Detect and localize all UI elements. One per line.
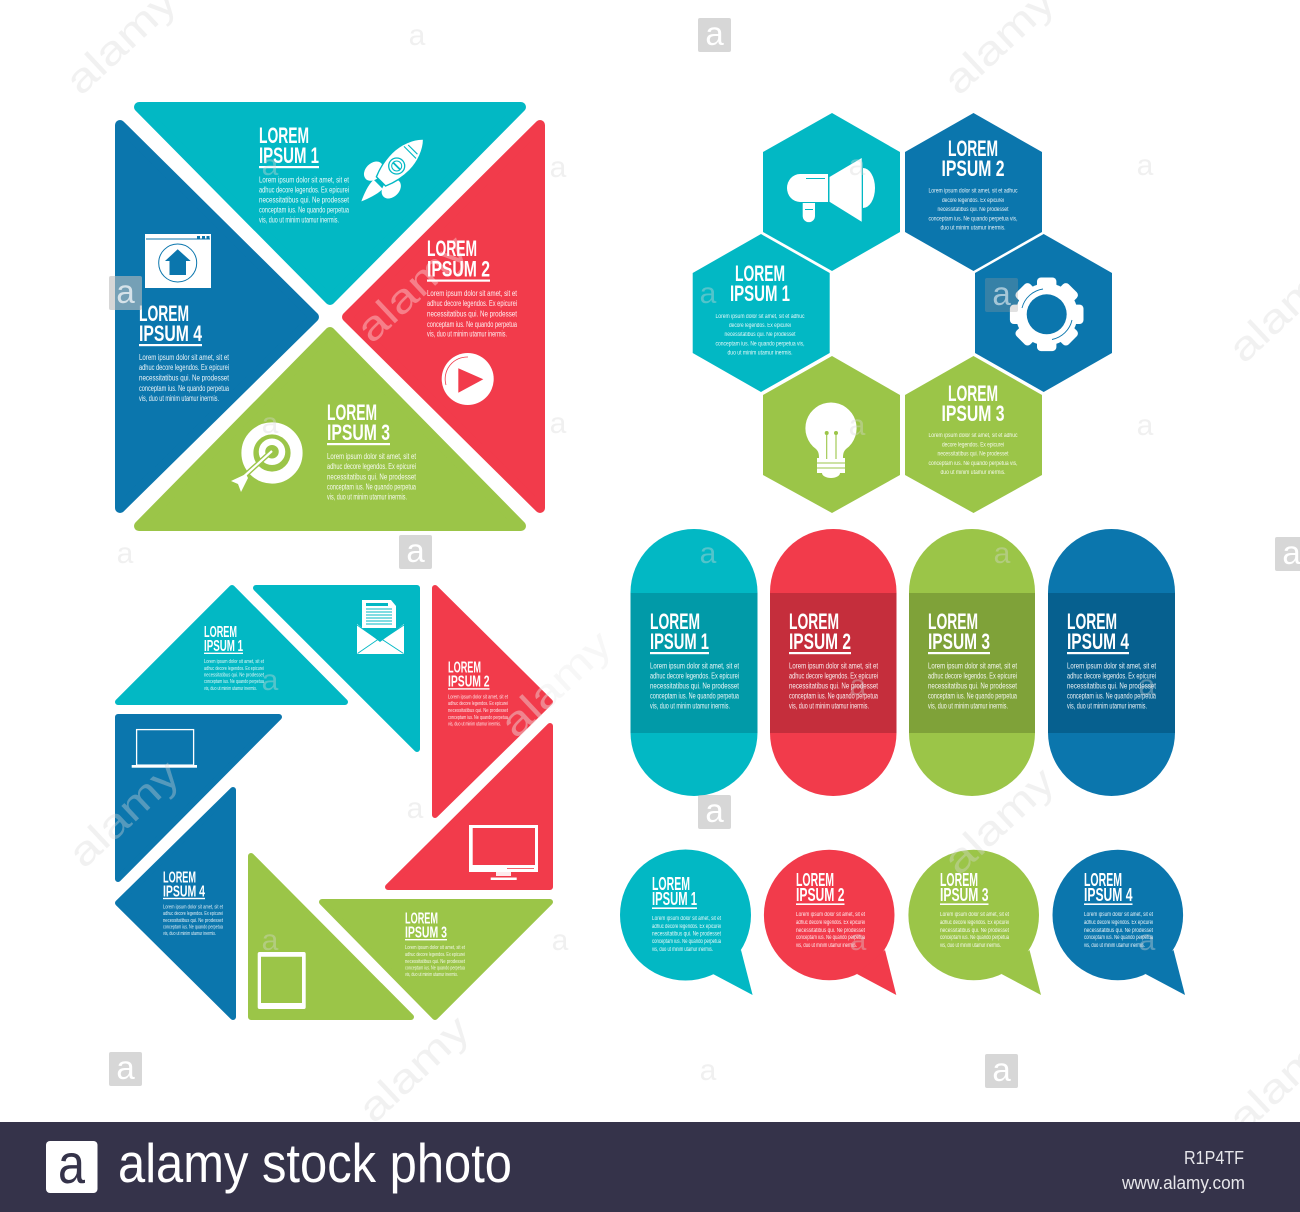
text: lorem ipsum 1: Lorem ipsum dolor sit amet, sit et xyxy=(204,659,264,665)
watermark: small a marks: a xyxy=(262,924,279,957)
text: lorem ipsum 4: IPSUM 4 xyxy=(1084,885,1132,905)
text: lorem ipsum 1: adhuc decore legendos. Ex epicurei xyxy=(204,666,264,672)
text: lorem ipsum 2: LOREM xyxy=(796,870,834,890)
text: lorem ipsum 4 xyxy=(1067,609,1157,710)
pill: red lorem ipsum 2 xyxy=(770,529,896,796)
text: lorem ipsum 3: IPSUM 3 xyxy=(327,420,390,445)
text: lorem ipsum 4: necessitatibus qui. Ne prodesset xyxy=(139,374,230,382)
text: lorem ipsum 2: LOREM xyxy=(948,136,998,161)
text: lorem ipsum 2: adhuc decore legendos. Ex epicurei xyxy=(427,299,517,308)
pill: green lorem ipsum 3 xyxy=(909,529,1035,796)
watermark: small a marks: a xyxy=(550,151,567,184)
watermark: small a marks: a xyxy=(849,149,866,182)
text: lorem ipsum 3: LOREM xyxy=(940,870,978,890)
text: lorem ipsum 2: Lorem ipsum dolor sit amet, sit et xyxy=(427,289,518,298)
text: lorem ipsum 2: Lorem ipsum dolor sit amet, sit et xyxy=(789,662,879,670)
text: lorem ipsum 2: Lorem ipsum dolor sit amet, sit et adhuc xyxy=(928,188,1018,194)
blade: teal with lorem ipsum 1 xyxy=(118,588,345,702)
text: lorem ipsum 2: Lorem ipsum dolor sit amet, sit et xyxy=(448,695,508,701)
segment: teal top triangle xyxy=(139,107,521,300)
text: lorem ipsum 2: conceptam ius. Ne quando perpetua xyxy=(427,320,517,329)
text: lorem ipsum 1: LOREM xyxy=(204,624,237,641)
watermark: alamy diagonals: alamy xyxy=(57,0,186,103)
watermark: alamy diagonals: alamy xyxy=(492,622,621,746)
icon: gear xyxy=(1010,278,1084,351)
text: lorem ipsum 1: conceptam ius. Ne quando perpetua xyxy=(204,679,264,685)
icon: tablet xyxy=(258,952,306,1009)
text: lorem ipsum 4: vis, duo ut minim utamur inermis. xyxy=(1067,702,1147,710)
panel: pill cards xyxy=(630,529,1175,796)
text: lorem ipsum 3: adhuc decore legendos. Ex epicurei xyxy=(327,462,416,471)
text: lorem ipsum 4: necessitatibus qui. Ne prodesset xyxy=(1084,928,1153,934)
text: lorem ipsum 1: IPSUM 1 xyxy=(259,143,319,168)
text: lorem ipsum 4: IPSUM 4 xyxy=(1067,629,1130,654)
watermark: a boxes: a xyxy=(992,275,1011,312)
text: lorem ipsum 1: Lorem ipsum dolor sit amet, sit et xyxy=(652,916,721,922)
text: lorem ipsum 3 xyxy=(327,400,417,502)
text: lorem ipsum 3: LOREM xyxy=(948,381,998,406)
blade: green with lorem ipsum 3 xyxy=(322,902,550,1017)
segment: green bottom triangle xyxy=(139,332,521,526)
text: lorem ipsum 1: LOREM xyxy=(650,609,700,634)
watermark: alamy diagonals: alamy xyxy=(60,752,189,876)
text: lorem ipsum 1: adhuc decore legendos. Ex epicurei xyxy=(650,672,739,680)
text: lorem ipsum 2: IPSUM 2 xyxy=(796,885,844,905)
text: lorem ipsum 1: Lorem ipsum dolor sit amet, sit et xyxy=(259,176,350,184)
text: lorem ipsum 1: IPSUM 1 xyxy=(204,638,243,655)
text: lorem ipsum 4: adhuc decore legendos. Ex epicurei xyxy=(1084,920,1153,926)
watermark: small a marks: a xyxy=(407,792,424,825)
text: lorem ipsum 2: conceptam ius. Ne quando perpetua xyxy=(448,715,508,721)
text: lorem ipsum 3: conceptam ius. Ne quando perpetua xyxy=(940,935,1009,941)
text: lorem ipsum 3: IPSUM 3 xyxy=(405,924,447,942)
text: lorem ipsum 3: Lorem ipsum dolor sit amet, sit et adhuc xyxy=(928,433,1018,439)
text: lorem ipsum 2: LOREM xyxy=(448,660,481,676)
text: lorem ipsum 1: duo ut minim utamur inermis. xyxy=(728,350,793,356)
text: lorem ipsum 2: necessitatibus qui. Ne prodesset xyxy=(448,708,508,714)
icon: light bulb xyxy=(805,402,857,478)
text: lorem ipsum 1: conceptam ius. Ne quando perpetua xyxy=(259,206,349,214)
text: lorem ipsum 4 xyxy=(139,301,230,403)
text: lorem ipsum 3: LOREM xyxy=(405,910,438,928)
text: lorem ipsum 4: IPSUM 4 xyxy=(139,321,203,346)
bubble: red lorem ipsum 2 xyxy=(764,850,896,995)
text: lorem ipsum 1: IPSUM 1 xyxy=(652,889,697,909)
hexagon: green light bulb xyxy=(763,356,900,513)
text: lorem ipsum 1: decore legendos. Ex epicurei xyxy=(729,323,791,329)
icon: rocket xyxy=(347,124,438,216)
watermark: a boxes: a xyxy=(705,15,724,52)
text: lorem ipsum 2: adhuc decore legendos. Ex epicurei xyxy=(448,701,508,707)
panel: speech bubbles xyxy=(620,850,1185,995)
icon: play button xyxy=(442,353,494,405)
text: lorem ipsum 1 xyxy=(716,261,805,356)
watermark: small a marks: a xyxy=(700,277,717,310)
watermark: small a marks: a xyxy=(700,1054,717,1087)
bubble: green lorem ipsum 3 xyxy=(908,850,1041,995)
text: lorem ipsum 4: LOREM xyxy=(1067,609,1117,634)
text: lorem ipsum 1: vis, duo ut minim utamur inermis. xyxy=(204,686,257,692)
text: lorem ipsum 2: Lorem ipsum dolor sit amet, sit et xyxy=(796,912,865,918)
text: lorem ipsum 4: LOREM xyxy=(163,870,196,886)
pill: blue lorem ipsum 4 xyxy=(1048,529,1175,796)
pill: teal lorem ipsum 1 xyxy=(630,529,758,796)
text: lorem ipsum 2: LOREM xyxy=(789,609,839,634)
watermark: small a marks: a xyxy=(1139,924,1156,957)
text: lorem ipsum 3: duo ut minim utamur inermis. xyxy=(940,470,1006,476)
watermark: a boxes: a xyxy=(406,532,425,569)
text: lorem ipsum 3: IPSUM 3 xyxy=(942,401,1004,426)
icon: laptop xyxy=(132,730,197,768)
text: lorem ipsum 2: LOREM xyxy=(427,236,477,261)
text: lorem ipsum 1 xyxy=(652,874,721,953)
hexagon: blue gear xyxy=(975,234,1112,392)
text: lorem ipsum 3 xyxy=(928,381,1018,476)
text: lorem ipsum 1: IPSUM 1 xyxy=(730,281,790,306)
watermark: a boxes: a xyxy=(116,273,135,310)
text: lorem ipsum 2: necessitatibus qui. Ne prodesset xyxy=(427,310,518,318)
text: lorem ipsum 2 xyxy=(928,136,1018,232)
text: lorem ipsum 1 xyxy=(259,123,350,224)
text: lorem ipsum 3: vis, duo ut minim utamur inermis. xyxy=(405,972,458,978)
text: lorem ipsum 1: vis, duo ut minim utamur inermis. xyxy=(652,947,713,953)
text: lorem ipsum 3: IPSUM 3 xyxy=(940,885,988,905)
text: lorem ipsum 2: IPSUM 2 xyxy=(942,156,1004,181)
text: lorem ipsum 1: vis, duo ut minim utamur inermis. xyxy=(259,216,339,224)
text: lorem ipsum 2: IPSUM 2 xyxy=(789,629,851,654)
text: lorem ipsum 2: vis, duo ut minim utamur inermis. xyxy=(448,722,501,728)
text: lorem ipsum 4 xyxy=(163,870,223,937)
text: lorem ipsum 2: conceptam ius. Ne quando perpetua vis, xyxy=(928,216,1018,222)
image id: R1P4TF xyxy=(1184,1148,1244,1168)
text: lorem ipsum 2 xyxy=(796,870,865,949)
watermark: alamy diagonals: alamy xyxy=(350,1007,479,1131)
text: lorem ipsum 4: conceptam ius. Ne quando perpetua xyxy=(139,384,229,393)
icon: megaphone xyxy=(787,158,875,222)
watermark: small a marks: a xyxy=(409,19,426,52)
icon: alamy logo: a xyxy=(58,1132,86,1195)
text: lorem ipsum 4: vis, duo ut minim utamur inermis. xyxy=(139,394,219,403)
blade: green with tablet xyxy=(251,856,411,1017)
text: lorem ipsum 1: necessitatibus qui. Ne prodesset xyxy=(724,332,796,338)
text: lorem ipsum 4: conceptam ius. Ne quando perpetua xyxy=(1084,935,1153,941)
text: lorem ipsum 3: necessitatibus qui. Ne prodesset xyxy=(938,452,1009,458)
text: lorem ipsum 3: Lorem ipsum dolor sit amet, sit et xyxy=(940,912,1009,918)
watermark: small a marks: a xyxy=(850,669,867,702)
text: lorem ipsum 4: conceptam ius. Ne quando perpetua xyxy=(1067,692,1156,700)
panel: square diagram xyxy=(120,107,540,526)
text: lorem ipsum 1: Lorem ipsum dolor sit amet, sit et adhuc xyxy=(716,314,804,320)
text: lorem ipsum 3: LOREM xyxy=(327,400,377,425)
text: lorem ipsum 1: vis, duo ut minim utamur inermis. xyxy=(650,702,730,710)
text: lorem ipsum 1: conceptam ius. Ne quando perpetua xyxy=(652,939,721,945)
text: lorem ipsum 2 xyxy=(789,609,879,710)
hexagon: blue lorem ipsum 2 xyxy=(905,113,1042,271)
text: lorem ipsum 3: necessitatibus qui. Ne prodesset xyxy=(327,472,417,482)
text: lorem ipsum 1: necessitatibus qui. Ne prodesset xyxy=(652,932,721,938)
text: lorem ipsum 4: necessitatibus qui. Ne prodesset xyxy=(1067,682,1157,690)
text: lorem ipsum 3: adhuc decore legendos. Ex epicurei xyxy=(405,952,465,958)
bubble: teal lorem ipsum 1 xyxy=(620,850,753,995)
text: lorem ipsum 3: LOREM xyxy=(928,609,978,634)
watermark: a boxes: a xyxy=(992,1051,1011,1088)
text: lorem ipsum 3: adhuc decore legendos. Ex epicurei xyxy=(928,672,1017,680)
segment: red right triangle xyxy=(347,125,540,508)
watermark: small a marks: a xyxy=(262,407,279,440)
text: lorem ipsum 2: necessitatibus qui. Ne prodesset xyxy=(796,928,865,934)
text: lorem ipsum 1 xyxy=(204,624,264,692)
text: lorem ipsum 4: adhuc decore legendos. Ex epicurei xyxy=(139,363,229,372)
text: lorem ipsum 4: conceptam ius. Ne quando perpetua xyxy=(163,925,223,931)
text: lorem ipsum 3: IPSUM 3 xyxy=(928,629,990,654)
text: lorem ipsum 2: IPSUM 2 xyxy=(448,674,490,690)
text: lorem ipsum 1: adhuc decore legendos. Ex epicurei xyxy=(259,186,349,194)
panel: aperture diagram xyxy=(118,588,550,1017)
watermark: small a marks: a xyxy=(1137,149,1154,182)
text: lorem ipsum 1: conceptam ius. Ne quando perpetua vis, xyxy=(716,342,805,348)
text: lorem ipsum 3: Lorem ipsum dolor sit amet, sit et xyxy=(928,662,1018,670)
text: lorem ipsum 2 xyxy=(448,660,508,728)
text: lorem ipsum 1: LOREM xyxy=(259,123,309,148)
text: lorem ipsum 3: conceptam ius. Ne quando perpetua xyxy=(327,482,416,492)
website: www.alamy.com xyxy=(1121,1173,1245,1193)
hexagon: teal megaphone xyxy=(763,113,900,271)
text: lorem ipsum 2: vis, duo ut minim utamur inermis. xyxy=(427,330,507,338)
text: lorem ipsum 4: necessitatibus qui. Ne prodesset xyxy=(163,918,223,924)
text: lorem ipsum 2: adhuc decore legendos. Ex epicurei xyxy=(796,920,865,926)
hexagon: teal lorem ipsum 1 xyxy=(693,234,830,392)
panel: hexagon ring xyxy=(693,113,1112,513)
text: lorem ipsum 3: necessitatibus qui. Ne prodesset xyxy=(405,959,465,965)
text: lorem ipsum 4: Lorem ipsum dolor sit amet, sit et xyxy=(1067,662,1157,670)
blade: red with monitor xyxy=(388,726,550,887)
text: lorem ipsum 4: Lorem ipsum dolor sit amet, sit et xyxy=(139,353,230,362)
bubble: blue lorem ipsum 4 xyxy=(1052,850,1185,995)
watermark: small a marks: a xyxy=(994,537,1011,570)
text: lorem ipsum 1 xyxy=(650,609,740,710)
hexagon: green lorem ipsum 3 xyxy=(905,356,1042,513)
text: lorem ipsum 4: LOREM xyxy=(139,301,189,326)
text: lorem ipsum 3: conceptam ius. Ne quando perpetua xyxy=(405,966,465,972)
text: lorem ipsum 3 xyxy=(928,609,1018,710)
text: lorem ipsum 1: LOREM xyxy=(735,261,785,286)
text: lorem ipsum 3: necessitatibus qui. Ne prodesset xyxy=(940,928,1009,934)
text: lorem ipsum 3: vis, duo ut minim utamur inermis. xyxy=(940,943,1001,949)
text: lorem ipsum 3 xyxy=(405,910,465,978)
text: lorem ipsum 3: Lorem ipsum dolor sit amet, sit et xyxy=(327,452,417,461)
text: lorem ipsum 3: adhuc decore legendos. Ex epicurei xyxy=(940,920,1009,926)
text: lorem ipsum 1: LOREM xyxy=(652,874,690,894)
text: lorem ipsum 3: vis, duo ut minim utamur inermis. xyxy=(327,492,407,502)
text: lorem ipsum 2 xyxy=(427,236,518,338)
watermark: small a marks xyxy=(117,19,1156,1087)
blade: red with lorem ipsum 2 xyxy=(435,588,550,815)
watermark: small a marks: a xyxy=(1139,669,1156,702)
text: lorem ipsum 2: duo ut minim utamur inermis. xyxy=(940,226,1006,232)
blade: blue with laptop xyxy=(118,717,279,879)
text: lorem ipsum 2: decore legendos. Ex epicurei xyxy=(942,198,1004,204)
blade: teal with envelope xyxy=(256,588,417,749)
watermark: small a marks: a xyxy=(262,664,279,697)
text: lorem ipsum 3 xyxy=(940,870,1009,949)
watermark: a boxes: a xyxy=(705,792,724,829)
watermark: small a marks: a xyxy=(552,924,569,957)
text: lorem ipsum 1: necessitatibus qui. Ne prodesset xyxy=(650,682,740,690)
watermark: small a marks: a xyxy=(262,149,279,182)
text: lorem ipsum 1: conceptam ius. Ne quando perpetua xyxy=(650,692,739,700)
text: lorem ipsum 2: vis, duo ut minim utamur inermis. xyxy=(789,702,869,710)
text: lorem ipsum 3: vis, duo ut minim utamur inermis. xyxy=(928,702,1008,710)
watermark: alamy diagonals: alamy xyxy=(348,227,477,351)
watermark: small a marks: a xyxy=(700,537,717,570)
blade: blue with lorem ipsum 4 xyxy=(118,790,233,1017)
text: lorem ipsum 2: conceptam ius. Ne quando perpetua xyxy=(796,935,865,941)
icon: target with arrow xyxy=(231,428,297,492)
text: lorem ipsum 3: conceptam ius. Ne quando perpetua xyxy=(928,692,1017,700)
text: lorem ipsum 1: Lorem ipsum dolor sit amet, sit et xyxy=(650,662,740,670)
watermark: small a marks: a xyxy=(117,537,134,570)
watermark: alamy diagonals: alamy xyxy=(935,0,1064,103)
watermark: small a marks: a xyxy=(850,924,867,957)
icon: browser window with home arrow xyxy=(145,234,211,288)
text: lorem ipsum 2: vis, duo ut minim utamur inermis. xyxy=(796,943,857,949)
segment: blue left triangle xyxy=(120,125,314,508)
watermark: a boxes: a xyxy=(116,1049,135,1086)
watermark: alamy diagonals: alamy xyxy=(935,759,1064,883)
text: lorem ipsum 1: necessitatibus qui. Ne prodesset xyxy=(259,196,350,204)
text: lorem ipsum 3: conceptam ius. Ne quando perpetua vis, xyxy=(928,461,1018,467)
text: lorem ipsum 1: necessitatibus qui. Ne prodesset xyxy=(204,673,264,679)
watermark: small a marks: a xyxy=(849,409,866,442)
icon: desktop monitor xyxy=(469,825,538,880)
text: lorem ipsum 4: adhuc decore legendos. Ex epicurei xyxy=(1067,672,1156,680)
text: lorem ipsum 4: Lorem ipsum dolor sit amet, sit et xyxy=(163,905,223,911)
icon: alamy logo xyxy=(46,1132,98,1195)
brand name: alamy stock photo xyxy=(118,1132,512,1194)
text: lorem ipsum 4: IPSUM 4 xyxy=(163,884,205,900)
text: lorem ipsum 1: IPSUM 1 xyxy=(650,629,709,654)
text: lorem ipsum 4: vis, duo ut minim utamur inermis. xyxy=(1084,943,1145,949)
text: lorem ipsum 4: vis, duo ut minim utamur inermis. xyxy=(163,931,216,937)
text: lorem ipsum 3: necessitatibus qui. Ne prodesset xyxy=(928,682,1018,690)
text: lorem ipsum 4 xyxy=(1084,870,1153,949)
watermark: small a marks: a xyxy=(550,407,567,440)
footer bar xyxy=(0,1122,1300,1212)
text: lorem ipsum 2: conceptam ius. Ne quando perpetua xyxy=(789,692,878,700)
text: lorem ipsum 4: LOREM xyxy=(1084,870,1122,890)
icon: envelope with document xyxy=(357,600,404,654)
text: lorem ipsum 2: IPSUM 2 xyxy=(427,256,490,282)
text: lorem ipsum 2: adhuc decore legendos. Ex epicurei xyxy=(789,672,878,680)
text: lorem ipsum 3: Lorem ipsum dolor sit amet, sit et xyxy=(405,945,465,951)
text: lorem ipsum 4: adhuc decore legendos. Ex epicurei xyxy=(163,911,223,917)
text: lorem ipsum 2: necessitatibus qui. Ne prodesset xyxy=(789,682,879,690)
text: lorem ipsum 3: decore legendos. Ex epicurei xyxy=(942,442,1004,448)
watermark: small a marks: a xyxy=(1137,409,1154,442)
text: lorem ipsum 2: necessitatibus qui. Ne prodesset xyxy=(938,207,1009,213)
text: lorem ipsum 1: adhuc decore legendos. Ex epicurei xyxy=(652,924,721,930)
text: lorem ipsum 4: Lorem ipsum dolor sit amet, sit et xyxy=(1084,912,1153,918)
